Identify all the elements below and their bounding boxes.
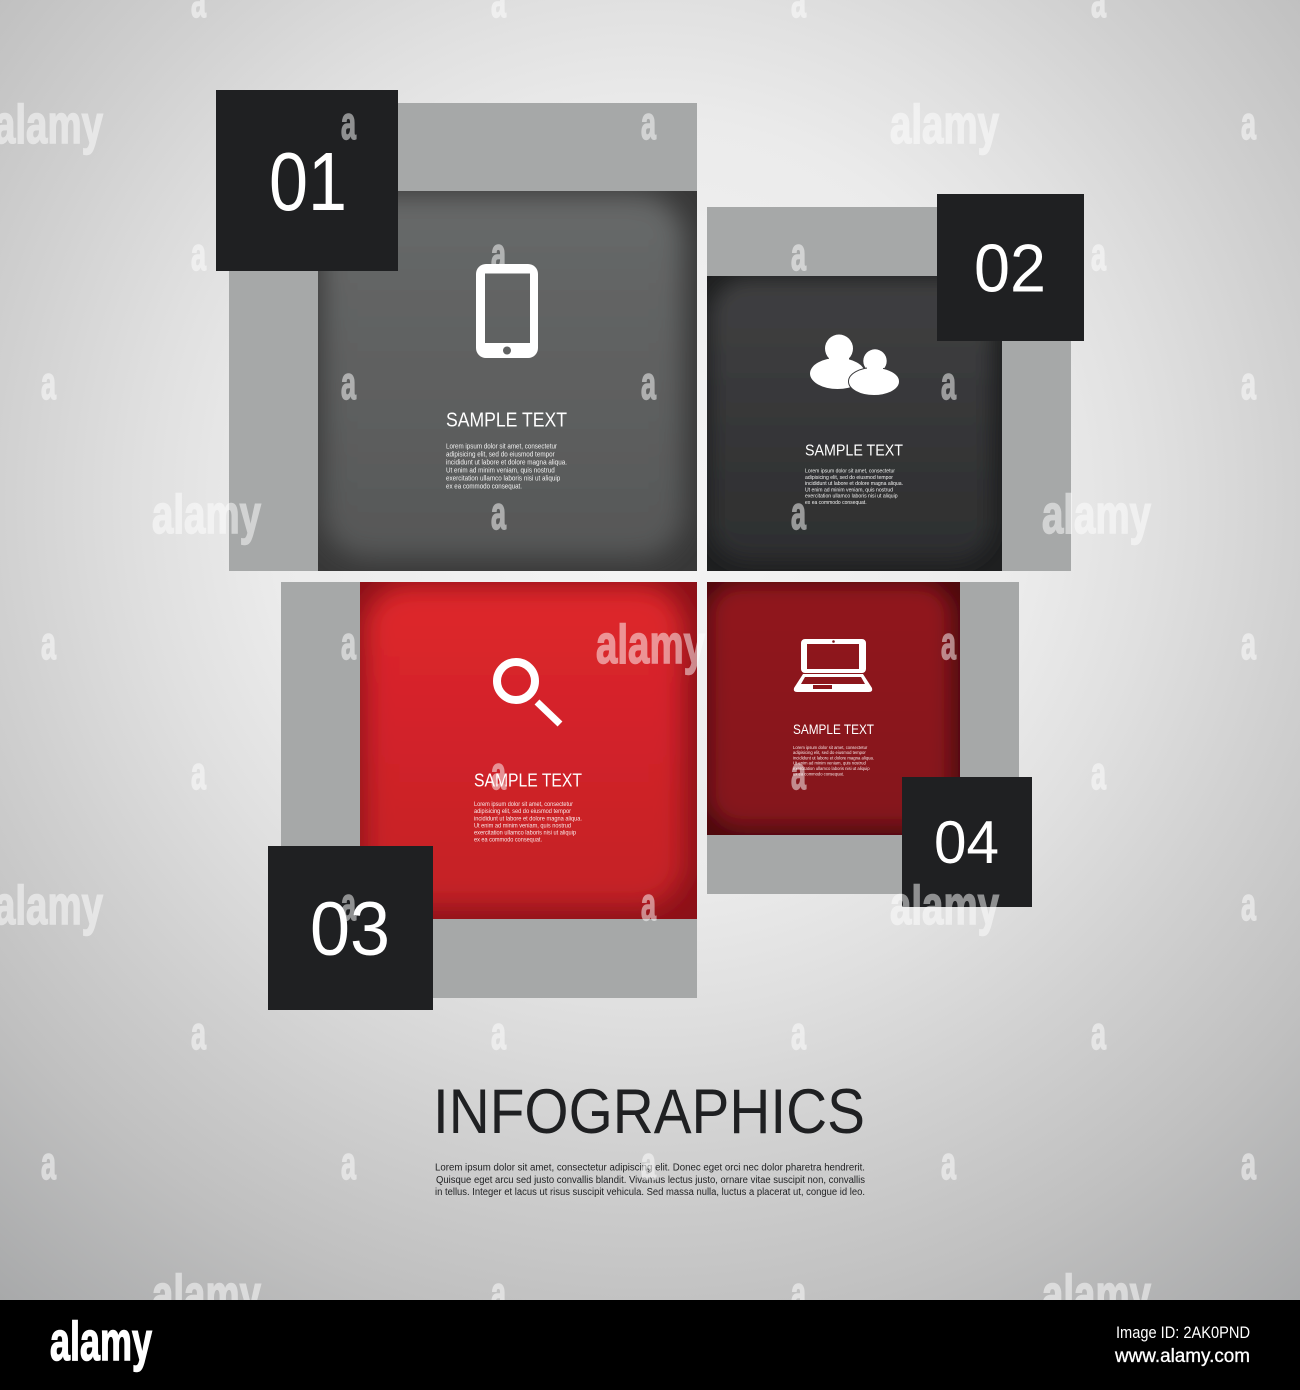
watermark pattern: alamy [596, 613, 705, 675]
body text: 04: Ut enim ad minim veniam, quis nostrud [793, 761, 866, 767]
body text: 03: Ut enim ad minim veniam, quis nostrud [474, 822, 571, 829]
footer image id: Image ID: 2AK0PND [1116, 1323, 1250, 1342]
body text: 01: adipisicing elit, sed do eiusmod tempor [446, 449, 555, 458]
footer logo: alamy [50, 1310, 152, 1372]
watermark pattern: a [41, 617, 56, 669]
body text: 04: ex ea commodo consequat. [793, 771, 844, 777]
watermark pattern: a [791, 1267, 806, 1319]
footer website: www.alamy.com [1114, 1346, 1250, 1367]
body text: 03: exercitation ullamco laboris nisi ut aliquip [474, 830, 576, 836]
watermark pattern: a [641, 1137, 656, 1189]
watermark pattern: a [341, 1137, 356, 1189]
badge: 04: 04 [934, 809, 999, 876]
panel: 02 [707, 207, 1071, 571]
body text: 02: incididunt ut labore et dolore magna aliqua. [805, 481, 903, 487]
dark square: 01 [318, 191, 697, 571]
badge: 02: 02 [974, 230, 1046, 306]
watermark pattern: a [1241, 1137, 1256, 1189]
watermark pattern: a [341, 357, 356, 409]
body text: 02 [805, 469, 903, 506]
intro paragraph: Lorem ipsum dolor sit amet, consectetur adipiscing elit. Donec eget orci nec dolor pharetra hendrerit. [435, 1162, 865, 1174]
body text: 03 [474, 801, 582, 844]
frame: 01 [229, 103, 697, 571]
watermark pattern: a [791, 487, 806, 539]
dark red square: 04 [707, 582, 960, 835]
watermark pattern: a [1241, 357, 1256, 409]
heading: sample text 04: SAMPLE TEXT [793, 722, 874, 737]
heading: sample text 02: SAMPLE TEXT [805, 442, 903, 459]
frame: 04 [707, 582, 1019, 894]
watermark pattern: a [41, 357, 56, 409]
body text: 01: Ut enim ad minim veniam, quis nostrud [446, 465, 555, 474]
watermark pattern: a [641, 97, 656, 149]
heading: sample text 03: SAMPLE TEXT [474, 771, 582, 791]
watermark pattern: a [941, 617, 956, 669]
watermark pattern: a [191, 228, 206, 280]
watermark pattern: alamy [1042, 1263, 1151, 1325]
watermark pattern: alamy [1042, 483, 1151, 545]
watermark pattern: a [491, 1007, 506, 1059]
body text: 02: ex ea commodo consequat. [805, 500, 867, 506]
footer bar [0, 1300, 1300, 1390]
intro paragraph [435, 1162, 865, 1198]
watermark pattern: a [491, 228, 506, 280]
watermark pattern: a [191, 1007, 206, 1059]
body text: 03: Lorem ipsum dolor sit amet, consectetur [474, 801, 574, 808]
panel: 03 [281, 582, 697, 998]
body text: 01: incididunt ut labore et dolore magna aliqua. [446, 457, 567, 466]
body text: 04 [793, 745, 874, 777]
watermark pattern: alamy [890, 874, 999, 936]
body text: 02: adipisicing elit, sed do eiusmod tempor [805, 475, 893, 481]
body text: 04: incididunt ut labore et dolore magna aliqua. [793, 755, 874, 761]
body text: 01: exercitation ullamco laboris nisi ut aliquip [446, 473, 560, 482]
watermark pattern: a [941, 357, 956, 409]
watermark pattern: a [791, 1007, 806, 1059]
body text: 02: Lorem ipsum dolor sit amet, consectetur [805, 469, 895, 475]
watermark pattern: a [1241, 97, 1256, 149]
icon: smartphone [476, 264, 538, 358]
watermark pattern: a [191, 747, 206, 799]
body text: 04: adipisicing elit, sed do eiusmod tempor [793, 750, 866, 756]
icon: magnifier [497, 662, 560, 724]
icon: people [810, 334, 900, 396]
watermark pattern: a [1241, 878, 1256, 930]
frame: 02 [707, 207, 1071, 571]
body text: 02: Ut enim ad minim veniam, quis nostrud [805, 487, 893, 493]
dark square: 02 [707, 276, 1002, 571]
heading: sample text 01: SAMPLE TEXT [446, 410, 567, 432]
badge: 02 [937, 194, 1084, 341]
watermark pattern: a [341, 617, 356, 669]
watermark pattern: a [1091, 747, 1106, 799]
watermark pattern: a [341, 97, 356, 149]
body text: 04: exercitation ullamco laboris nisi ut aliquip [793, 766, 870, 772]
watermark pattern: a [641, 878, 656, 930]
watermark pattern: a [1091, 1007, 1106, 1059]
watermark pattern: a [491, 1267, 506, 1319]
body text: 03: incididunt ut labore et dolore magna aliqua. [474, 815, 582, 822]
badge: 04 [902, 777, 1032, 907]
watermark pattern: a [791, 228, 806, 280]
badge: 01: 01 [269, 135, 347, 228]
frame: 03 [281, 582, 697, 998]
body text: 01: ex ea commodo consequat. [446, 481, 522, 490]
title: INFOGRAPHICS [433, 1077, 865, 1147]
body text: 02: exercitation ullamco laboris nisi ut aliquip [805, 494, 898, 500]
watermark pattern: alamy [152, 1263, 261, 1325]
body text: 01: Lorem ipsum dolor sit amet, consectetur [446, 441, 558, 450]
watermark pattern: alamy [152, 483, 261, 545]
watermark pattern: a [341, 878, 356, 930]
watermark pattern: a [1241, 617, 1256, 669]
intro paragraph: in tellus. Integer et lacus ut risus suscipit vehicula. Sed massa nulla, luctus a placerat ut, congue id leo. [435, 1187, 865, 1198]
badge: 01 [216, 90, 398, 271]
watermark pattern: a [491, 487, 506, 539]
watermark pattern: alamy [890, 93, 999, 155]
panel: 01 [229, 103, 697, 571]
badge: 03: 03 [310, 887, 390, 972]
body text: 03: ex ea commodo consequat. [474, 837, 542, 844]
watermark pattern: a [1091, 228, 1106, 280]
body text: 04: Lorem ipsum dolor sit amet, consectetur [793, 745, 868, 751]
watermark pattern: a [41, 1137, 56, 1189]
icon: laptop [794, 639, 872, 692]
badge: 03 [268, 846, 433, 1010]
watermark pattern: a [491, 747, 506, 799]
body text: 03: adipisicing elit, sed do eiusmod tempor [474, 808, 572, 815]
panel: 04 [707, 582, 1019, 894]
watermark pattern: a [641, 357, 656, 409]
watermark pattern: a [791, 747, 806, 799]
watermark pattern: a [941, 1137, 956, 1189]
red square: 03 [360, 582, 697, 919]
intro paragraph: Quisque eget arcu sed justo convallis blandit. Vivamus lectus justo, ornare vitae suscipit non, convallis [436, 1175, 865, 1186]
body text: 01 [446, 441, 567, 490]
